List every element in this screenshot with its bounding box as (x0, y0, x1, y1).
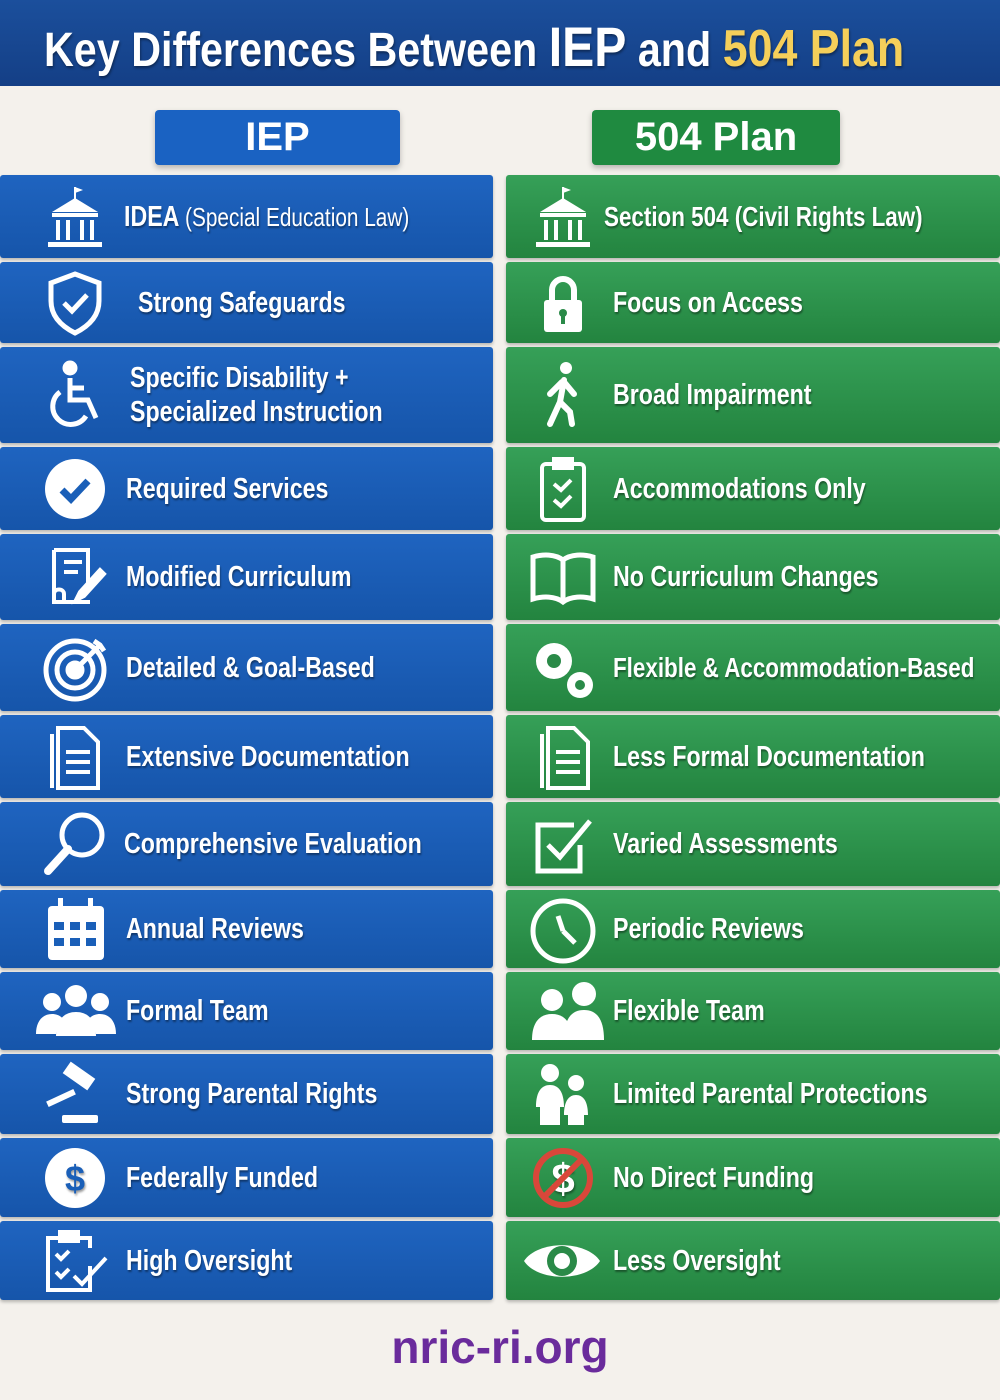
row: No Direct Funding (506, 1138, 1000, 1217)
row: High Oversight (0, 1221, 493, 1300)
row: Flexible Team: Flexible Team (613, 995, 765, 1027)
row: Detailed & Goal-Based (0, 624, 493, 711)
row: Annual Reviews (0, 890, 493, 968)
row: Federally Funded (0, 1138, 493, 1217)
row: Detailed & Goal-Based: Detailed & Goal-Based (126, 652, 375, 684)
row: Federally Funded: $ (65, 1158, 85, 1198)
row: Focus on Access (506, 262, 1000, 343)
row: Extensive Documentation (0, 715, 493, 798)
row: Broad Impairment: Broad Impairment (613, 379, 812, 411)
row: Periodic Reviews: Periodic Reviews (613, 913, 804, 945)
row: Section 504 (506, 175, 1000, 258)
row: Limited Parental Protections: Limited Parental Protections (613, 1078, 928, 1110)
row: Flexible & Accommodation-Based (506, 624, 1000, 711)
row: Comprehensive Evaluation (0, 802, 493, 886)
row: Less Formal Documentation (506, 715, 1000, 798)
row: Strong Safeguards (0, 262, 493, 343)
title bar (0, 0, 1000, 86)
row: Periodic Reviews (506, 890, 1000, 968)
row: Strong Parental Rights: Strong Parental Rights (126, 1078, 377, 1110)
row: Flexible & Accommodation-Based: Flexible & Accommodation-Based (613, 652, 974, 682)
row: Comprehensive Evaluation: Comprehensive Evaluation (124, 828, 422, 860)
row: Specific Disability (0, 347, 493, 443)
tab: 504 Plan (592, 110, 840, 165)
row: Required Services: Required Services (126, 472, 328, 504)
tab: IEP (155, 110, 400, 165)
row: Varied Assessments: Varied Assessments (613, 828, 838, 860)
row: High Oversight: High Oversight (126, 1244, 292, 1276)
tab: IEP: IEP (245, 115, 310, 159)
row: IDEA: IDEA (Special Education Law) (124, 200, 409, 232)
row: Required Services (0, 447, 493, 530)
row: No Curriculum Changes (506, 534, 1000, 620)
tab: 504 Plan: 504 Plan (635, 115, 797, 159)
row: No Curriculum Changes: No Curriculum Changes (613, 561, 879, 593)
row: Broad Impairment (506, 347, 1000, 443)
row: No Direct Funding: No Direct Funding (613, 1162, 814, 1194)
row: Less Oversight (506, 1221, 1000, 1300)
row: Strong Parental Rights (0, 1054, 493, 1134)
row: Flexible Team (506, 972, 1000, 1050)
row: Specific Disability: Specialized Instruction (130, 396, 383, 428)
row: Annual Reviews: Annual Reviews (126, 913, 304, 945)
row: Limited Parental Protections (506, 1054, 1000, 1134)
row: Less Oversight: Less Oversight (613, 1244, 781, 1276)
row: Modified Curriculum (0, 534, 493, 620)
row: Federally Funded: Federally Funded (126, 1162, 318, 1194)
footer: website: nric-ri.org (391, 1321, 609, 1373)
row: IDEA (0, 175, 493, 258)
row: Varied Assessments (506, 802, 1000, 886)
row: Strong Safeguards: Strong Safeguards (138, 286, 346, 318)
row: Accommodations Only (506, 447, 1000, 530)
row: Formal Team: Formal Team (126, 995, 269, 1027)
row: Modified Curriculum: Modified Curriculum (126, 561, 352, 593)
row: Less Formal Documentation: Less Formal Documentation (613, 740, 925, 772)
row: Specific Disability: Specific Disability + (130, 362, 349, 394)
row: Section 504: Section 504 (Civil Rights Law) (604, 200, 923, 232)
row: Accommodations Only: Accommodations Only (613, 472, 866, 504)
row: Formal Team (0, 972, 493, 1050)
row: No Direct Funding: $ (551, 1154, 575, 1202)
title: Key Differences Between IEP and 504 Plan (44, 15, 904, 78)
row: Focus on Access: Focus on Access (613, 286, 803, 318)
row: Extensive Documentation: Extensive Documentation (126, 740, 410, 772)
